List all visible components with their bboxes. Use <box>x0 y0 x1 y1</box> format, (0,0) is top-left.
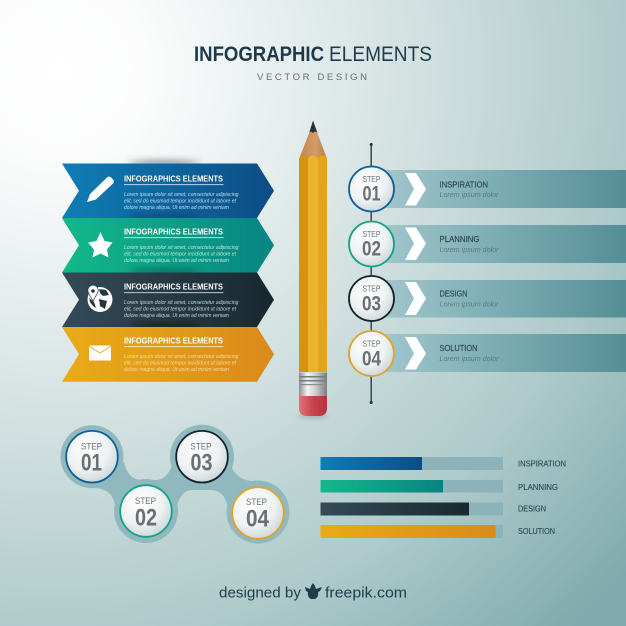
bubble step 03 <box>176 431 228 483</box>
bubble step 04: STEP <box>246 497 267 507</box>
title: INFOGRAPHIC <box>194 43 324 66</box>
pencil ferrule <box>299 372 327 396</box>
bubble step 02 <box>120 485 172 537</box>
ribbon 1 heading: INFOGRAPHICS ELEMENTS <box>124 174 223 184</box>
step 04 row: STEP <box>362 340 380 348</box>
ribbon 3 text: dolore magna aliqua. Ut enim ad minim veniam <box>124 313 230 319</box>
footer credit: freepik.com <box>325 584 407 602</box>
icon: pencil <box>87 176 114 202</box>
ribbon 4 text: dolore magna aliqua. Ut enim ad minim veniam <box>124 367 230 373</box>
panel: arrow ribbons <box>62 161 274 382</box>
ribbon 4 <box>62 327 274 382</box>
ribbon 3 heading: INFOGRAPHICS ELEMENTS <box>124 282 223 292</box>
ribbon 1 text <box>124 192 239 211</box>
bar: design: DESIGN <box>518 504 546 514</box>
step 03 row: Lorem ipsum dolor <box>440 300 499 308</box>
title: ELEMENTS <box>329 43 432 66</box>
timeline line <box>370 143 373 404</box>
ribbon 2 text: dolore magna aliqua. Ut enim ad minim veniam <box>124 258 230 264</box>
ribbon 3 text <box>124 300 239 319</box>
step 02 row: Lorem ipsum dolor <box>440 245 499 254</box>
ribbon 4 text: elit, sed do eiusmod tempor incididunt ut labore et <box>124 360 237 366</box>
bar: solution <box>320 525 555 538</box>
step 03 row <box>349 276 626 321</box>
step 01 row <box>349 166 626 212</box>
bar chart <box>320 457 566 538</box>
bubble step 02: 02 <box>135 504 157 532</box>
icon: envelope <box>89 346 111 360</box>
step 02 row: STEP <box>362 230 380 239</box>
step 04 row: 04 <box>362 348 381 370</box>
step 01 row: 01 <box>362 183 381 206</box>
icon: star <box>88 232 112 258</box>
bar: design <box>320 502 546 516</box>
ribbon 2 text <box>124 245 239 264</box>
step 03 row: STEP <box>362 284 380 294</box>
bubble step 01: STEP <box>81 441 102 451</box>
footer credit <box>219 583 407 602</box>
ribbon 2 <box>62 218 274 274</box>
pencil <box>298 120 328 418</box>
ribbon 1 text: Lorem ipsum dolor sit amet, consectetur adipiscing <box>124 192 239 198</box>
ribbon 2 text: elit, sed do eiusmod tempor incididunt ut labore et <box>124 252 237 258</box>
icon: freepik logo <box>305 583 322 599</box>
ribbon 4 text: Lorem ipsum dolor sit amet, consectetur adipiscing <box>124 354 239 360</box>
icon: globe <box>88 285 112 312</box>
ribbon 1 text: dolore magna aliqua. Ut enim ad minim veniam <box>124 205 230 211</box>
bubble step 03: STEP <box>190 441 212 451</box>
step 03 row: 03 <box>362 292 381 316</box>
ribbon 1 <box>62 164 274 220</box>
ribbon 1 text: elit, sed do eiusmod tempor incididunt ut labore et <box>124 198 237 204</box>
ribbon 3 text: Lorem ipsum dolor sit amet, consectetur adipiscing <box>124 300 239 306</box>
footer credit: designed by <box>219 584 301 602</box>
step 04 row: SOLUTION <box>440 344 478 353</box>
step 02 row: 02 <box>362 238 381 261</box>
bar: planning <box>320 480 558 492</box>
step 01 row: Lorem ipsum dolor <box>440 190 499 199</box>
bubble step 01 <box>66 431 118 483</box>
bubble step 04 <box>232 487 284 539</box>
subtitle: VECTOR DESIGN <box>257 72 367 83</box>
step 02 row <box>349 222 626 266</box>
step 03 row: DESIGN <box>440 290 468 298</box>
bar: inspiration <box>320 457 566 470</box>
ribbon 4 text <box>124 354 239 373</box>
bubble step 04: 04 <box>246 506 270 532</box>
step 01 row: INSPIRATION <box>440 180 488 190</box>
step 02 row: PLANNING <box>440 235 480 244</box>
bubble step 03: 03 <box>190 450 212 477</box>
step 01 row: STEP <box>362 175 380 184</box>
ribbon 4 heading: INFOGRAPHICS ELEMENTS <box>124 336 223 346</box>
ribbon 3 text: elit, sed do eiusmod tempor incididunt ut labore et <box>124 306 237 312</box>
step 04 row: Lorem ipsum dolor <box>440 354 499 363</box>
panel: step timeline <box>349 143 626 404</box>
panel: connected step bubbles <box>60 425 290 544</box>
pencil eraser <box>299 396 327 416</box>
bubble connector shape <box>60 425 290 544</box>
bar: planning: PLANNING <box>518 483 558 492</box>
bar: inspiration: INSPIRATION <box>518 460 566 468</box>
step 04 row <box>349 331 626 376</box>
bubble step 02: STEP <box>135 496 156 506</box>
ribbon 3 <box>62 272 274 329</box>
bubble step 01: 01 <box>81 450 102 477</box>
ribbon 2 text: Lorem ipsum dolor sit amet, consectetur adipiscing <box>124 245 239 251</box>
title <box>194 43 432 66</box>
bar: solution: SOLUTION <box>518 527 555 536</box>
ribbon 2 heading: INFOGRAPHICS ELEMENTS <box>124 226 223 236</box>
